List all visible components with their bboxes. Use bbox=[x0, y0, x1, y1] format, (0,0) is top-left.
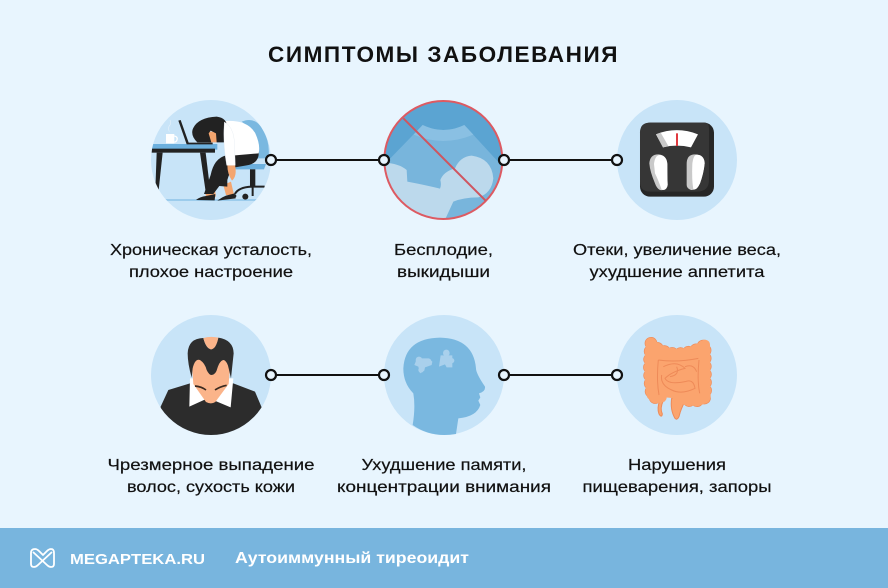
caption: fatigue bbox=[110, 242, 312, 281]
caption: hair loss bbox=[108, 457, 315, 496]
icon: crossed-out ultrasound bbox=[382, 101, 505, 223]
sweater bbox=[160, 383, 262, 435]
title: СИМПТОМЫ ЗАБОЛЕВАНИЯ bbox=[268, 42, 619, 67]
brand name: MEGAPTEKA.RU bbox=[70, 551, 205, 568]
caption: fatigue: Хроническая усталость, bbox=[110, 242, 312, 259]
puzzle pieces bbox=[414, 350, 454, 373]
caption: digestion bbox=[582, 457, 772, 496]
footer topic: Аутоиммунный тиреоидит bbox=[235, 550, 469, 567]
caption: edema bbox=[573, 242, 781, 281]
connector lines row 1 bbox=[271, 159, 617, 161]
caption: edema: Отеки, увеличение веса, bbox=[573, 242, 781, 259]
caption: infertility: Бесплодие, bbox=[394, 242, 493, 259]
caption: infertility bbox=[394, 242, 493, 281]
caption: edema: ухудшение аппетита bbox=[590, 264, 765, 281]
caption: hair loss: волос, сухость кожи bbox=[127, 479, 295, 496]
icon: intestines bbox=[617, 315, 737, 435]
icon: exhausted woman at desk bbox=[151, 100, 271, 220]
caption: digestion: пищеварения, запоры bbox=[582, 479, 772, 496]
footer bar bbox=[0, 528, 888, 588]
icon: bathroom scale bbox=[617, 100, 737, 220]
icon: logo bbox=[31, 549, 54, 567]
caption: infertility: выкидыши bbox=[397, 264, 490, 281]
caption: fatigue: плохое настроение bbox=[129, 264, 293, 281]
caption: memory bbox=[337, 457, 551, 496]
connector nodes bbox=[266, 155, 622, 380]
caption: memory: Ухудшение памяти, bbox=[362, 457, 526, 474]
caption: hair loss: Чрезмерное выпадение bbox=[108, 457, 315, 474]
connector lines row 2 bbox=[271, 374, 617, 376]
caption: digestion: Нарушения bbox=[628, 457, 726, 474]
icon: man with hair loss bbox=[151, 315, 271, 443]
icon: head with puzzle pieces bbox=[384, 315, 504, 435]
caption: memory: концентрации внимания bbox=[337, 479, 551, 496]
